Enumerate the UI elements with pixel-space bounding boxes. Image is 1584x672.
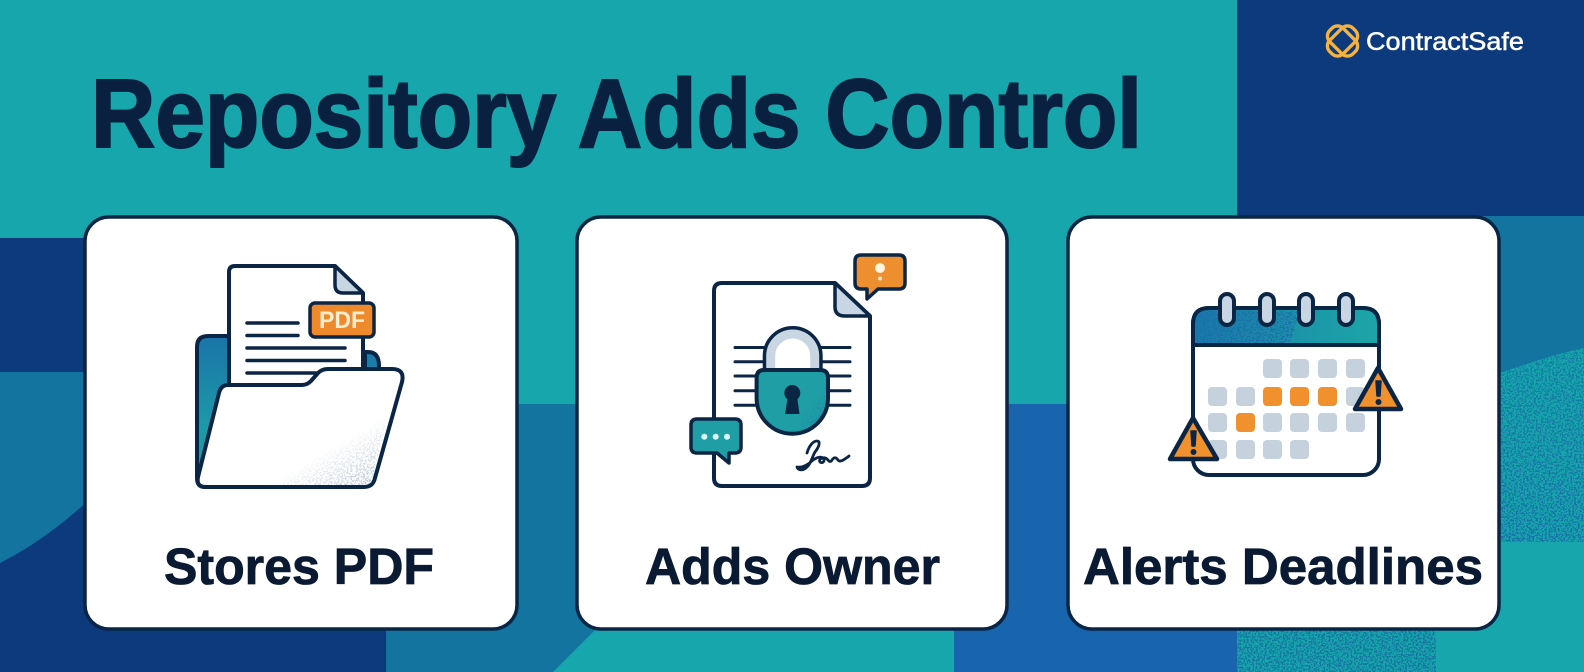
icon: folder with PDF (197, 266, 403, 487)
PDF tag (310, 303, 374, 337)
icon: interlocked rings (1324, 23, 1361, 59)
icon: calendar with warnings (1170, 294, 1401, 475)
teal comment bubble (691, 419, 741, 463)
warning triangle right (1355, 368, 1401, 409)
card (1068, 217, 1499, 629)
orange comment bubble (855, 255, 905, 299)
panel: alerts deadlines (1068, 217, 1499, 629)
card (577, 217, 1007, 629)
folder front (198, 369, 403, 487)
padlock (757, 334, 828, 434)
panel: stores PDF (85, 217, 517, 629)
icon: locked document (691, 255, 905, 486)
signature (797, 441, 849, 470)
label: Adds Owner (645, 538, 940, 595)
brand name: ContractSafe (1366, 28, 1524, 56)
card (85, 217, 517, 629)
date cells (1208, 359, 1365, 459)
binder rings (1220, 294, 1353, 325)
warning triangle left (1170, 418, 1217, 459)
logo: ContractSafe (1324, 23, 1524, 59)
label: Stores PDF (164, 538, 434, 595)
title: Repository Adds Control (91, 59, 1142, 168)
PDF tag: PDF (319, 307, 365, 334)
label: Alerts Deadlines (1083, 538, 1483, 595)
panel: adds owner (577, 217, 1007, 629)
highlighted dates (1236, 387, 1337, 432)
